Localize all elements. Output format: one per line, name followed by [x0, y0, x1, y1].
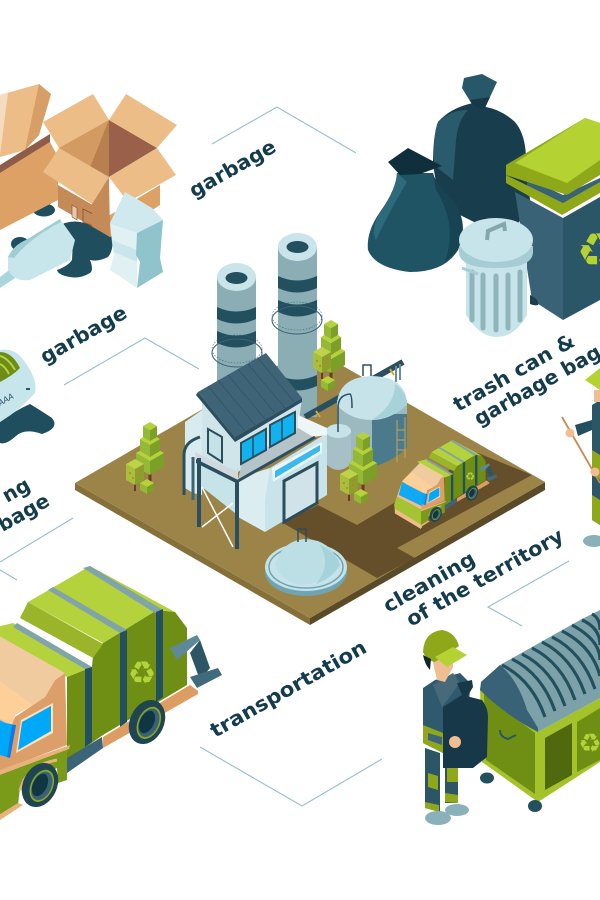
back block — [185, 410, 202, 495]
label: garbage (boxes): garbage — [185, 134, 280, 202]
chimney right — [272, 233, 322, 417]
tank — [337, 376, 407, 467]
round bag — [368, 173, 463, 272]
worker with bag — [423, 630, 488, 825]
label: of the territory: of the territory — [402, 523, 568, 631]
pipe — [305, 362, 403, 417]
posts and braces — [197, 458, 201, 527]
worker with broom — [562, 368, 600, 547]
balcony right floor and rail — [238, 428, 315, 480]
torso — [423, 673, 470, 753]
big door — [284, 463, 317, 522]
window strip — [272, 442, 322, 482]
label: trash can line: trash can & — [449, 328, 579, 416]
ground trees — [136, 422, 164, 482]
icon: sweeper container — [0, 350, 54, 443]
balcony left rail — [195, 452, 238, 480]
right face — [265, 433, 327, 532]
bottle — [0, 265, 21, 288]
open box — [58, 185, 110, 237]
upper door — [208, 429, 222, 462]
right face — [538, 698, 600, 802]
small tank — [326, 394, 352, 470]
road — [283, 453, 532, 578]
central plant platform — [75, 233, 545, 625]
trees behind — [317, 320, 345, 380]
dumpster — [480, 610, 600, 812]
label: transportation: transportation — [206, 635, 371, 742]
label: garbage (container): garbage — [36, 300, 131, 368]
lid — [481, 610, 600, 732]
metal can — [466, 262, 527, 337]
big truck — [0, 566, 222, 828]
paper stack — [110, 223, 137, 288]
ink stains — [11, 204, 112, 278]
windows — [241, 429, 266, 464]
group: cardboard boxes and litter — [0, 84, 177, 288]
label: cleaning: cleaning — [379, 546, 479, 617]
roof — [198, 353, 302, 437]
chimney left — [212, 263, 262, 387]
bin — [515, 192, 563, 320]
bag — [443, 695, 488, 768]
building — [184, 353, 327, 549]
left face — [480, 688, 538, 802]
left box — [0, 142, 58, 230]
wheels — [480, 772, 494, 784]
hand — [449, 736, 461, 748]
group: trash bags, can and bin — [368, 74, 600, 337]
label connector lines — [0, 107, 569, 806]
tall bag — [433, 103, 530, 240]
head — [432, 650, 453, 682]
small truck — [394, 440, 497, 529]
upper walls — [202, 397, 238, 480]
manhole lid — [265, 529, 347, 596]
legs — [445, 760, 458, 803]
wall under balcony — [198, 462, 240, 517]
